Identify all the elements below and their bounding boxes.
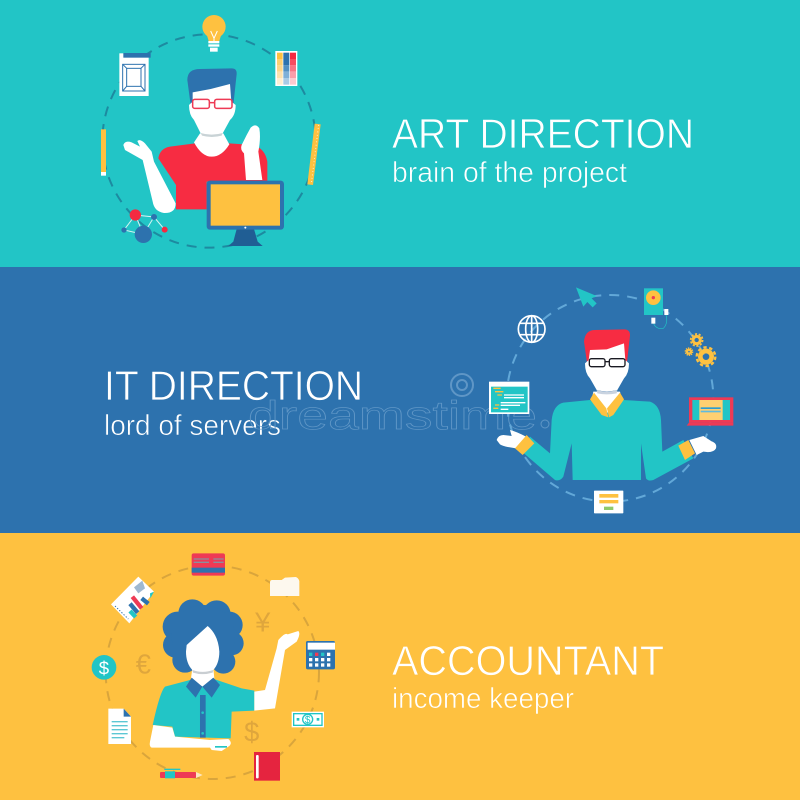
icon: globe bbox=[518, 316, 545, 342]
panel: it direction bbox=[0, 267, 800, 533]
icon: desktop monitor bbox=[207, 181, 284, 246]
icon: info card bbox=[594, 491, 623, 513]
subheading: brain of the project: brain of the project bbox=[392, 157, 627, 189]
icon: text document bbox=[108, 709, 131, 744]
heading: accountant: ACCOUNTANT bbox=[392, 637, 664, 684]
heading: art direction: ART DIRECTION bbox=[392, 110, 694, 157]
icon: pencil bbox=[101, 129, 106, 176]
icon: credit card bbox=[192, 553, 225, 576]
icon: calculator bbox=[306, 641, 335, 669]
icon: red notebook bbox=[254, 752, 280, 781]
watermark: dreamstime bbox=[248, 374, 549, 438]
icon: currency symbols: € bbox=[136, 648, 151, 679]
icon: pen bbox=[160, 769, 203, 778]
icon: banknote: $ bbox=[305, 715, 311, 726]
figure: accountant bbox=[150, 599, 299, 751]
illustration: accountant with finance items bbox=[92, 553, 335, 781]
icon: code window bbox=[489, 382, 529, 414]
watermark: dreamstime: dreamstime bbox=[248, 394, 537, 438]
subheading: income keeper: income keeper bbox=[392, 683, 574, 715]
icon: currency symbols: ¥ bbox=[254, 606, 271, 637]
icon: light bulb bbox=[202, 15, 226, 52]
panel: art direction bbox=[0, 0, 800, 267]
icon: blueprint document bbox=[119, 53, 151, 96]
icon: ruler bbox=[307, 124, 321, 185]
icon: folder bbox=[270, 577, 299, 596]
icon: banknote bbox=[292, 712, 324, 727]
icon: laptop bbox=[687, 397, 733, 426]
icon: dollar coin: $ bbox=[99, 657, 110, 678]
subheading: lord of servers: lord of servers bbox=[104, 410, 281, 442]
heading: it direction: IT DIRECTION bbox=[104, 362, 363, 409]
figure: art director bbox=[123, 68, 267, 213]
icon: report sheet bbox=[111, 577, 154, 623]
illustration: art director with tools bbox=[101, 15, 321, 248]
icon: gears bbox=[685, 334, 715, 366]
icon: colour palette bbox=[275, 51, 297, 86]
icon: hard drive bbox=[644, 288, 668, 329]
figure: it director bbox=[497, 329, 716, 481]
illustration: it director with devices bbox=[489, 287, 733, 513]
icon: molecule network bbox=[121, 209, 168, 243]
icon: dollar coin bbox=[92, 655, 116, 680]
icon: currency symbols: $ bbox=[244, 717, 259, 748]
icon: cursor arrow bbox=[576, 287, 597, 307]
icon: currency symbols bbox=[136, 606, 271, 748]
panel: accountant bbox=[0, 533, 800, 800]
